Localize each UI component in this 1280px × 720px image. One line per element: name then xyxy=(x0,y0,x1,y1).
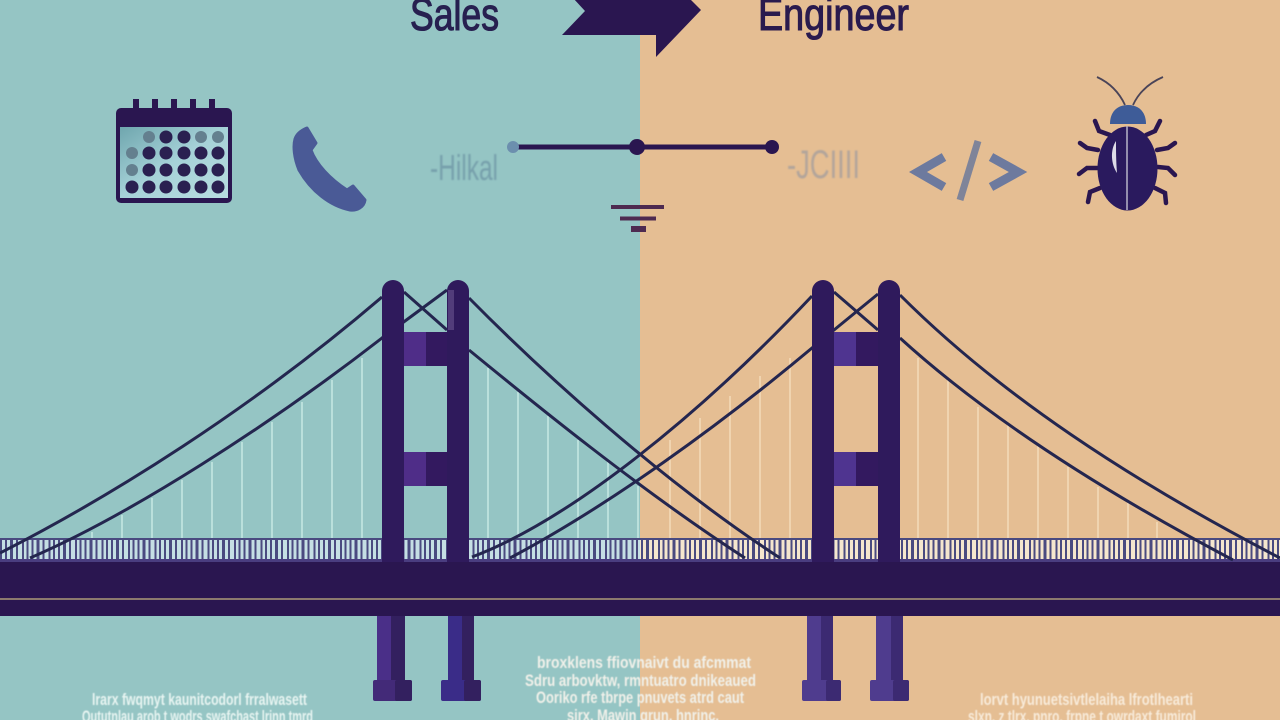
piers xyxy=(373,616,909,701)
arrow: sales to engineer xyxy=(562,0,701,57)
text block: centre caption xyxy=(525,653,756,720)
bridge xyxy=(0,280,1280,701)
icon: ground symbol xyxy=(611,205,664,232)
road deck xyxy=(0,562,1280,616)
text block: right caption: lorvt hyunuetsivtlelaiha lfrotlhearti xyxy=(980,690,1193,709)
text block: centre caption: broxklens ffiovnaivt du afcmmat xyxy=(537,653,751,672)
faint label: right of timeline: -JCIIII xyxy=(787,143,860,187)
text block: right caption xyxy=(968,690,1196,720)
panel: engineer background xyxy=(640,0,1280,720)
right tower xyxy=(812,280,900,562)
icon: calendar xyxy=(116,99,232,203)
icon: bug xyxy=(1079,77,1175,210)
icon: telephone xyxy=(294,128,365,210)
timeline end dot xyxy=(765,140,779,154)
railing xyxy=(0,538,1280,563)
main cables xyxy=(0,290,1280,560)
bug head xyxy=(1110,105,1146,124)
timeline start dot xyxy=(507,141,519,153)
icon: code brackets xyxy=(918,141,1018,200)
text block: left caption xyxy=(82,690,313,720)
bug legs xyxy=(1079,121,1175,203)
bug body xyxy=(1098,126,1158,210)
bug antennae xyxy=(1097,77,1163,105)
left tower xyxy=(382,280,469,562)
faint label: left of timeline: -Hilkal xyxy=(430,147,498,188)
text block: centre caption: Sdru arbovktw, rmntuatro dnikeaued xyxy=(525,671,756,690)
text block: centre caption: Ooriko rfe tbrpe pnuvets atrd caut xyxy=(536,688,744,707)
suspender hangers xyxy=(92,358,1157,540)
timeline connector xyxy=(507,139,779,155)
panel: sales background xyxy=(0,0,640,720)
text block: left caption: lrarx fwqmyt kaunitcodorl frralwasett xyxy=(92,690,307,709)
timeline centre dot xyxy=(629,139,645,155)
